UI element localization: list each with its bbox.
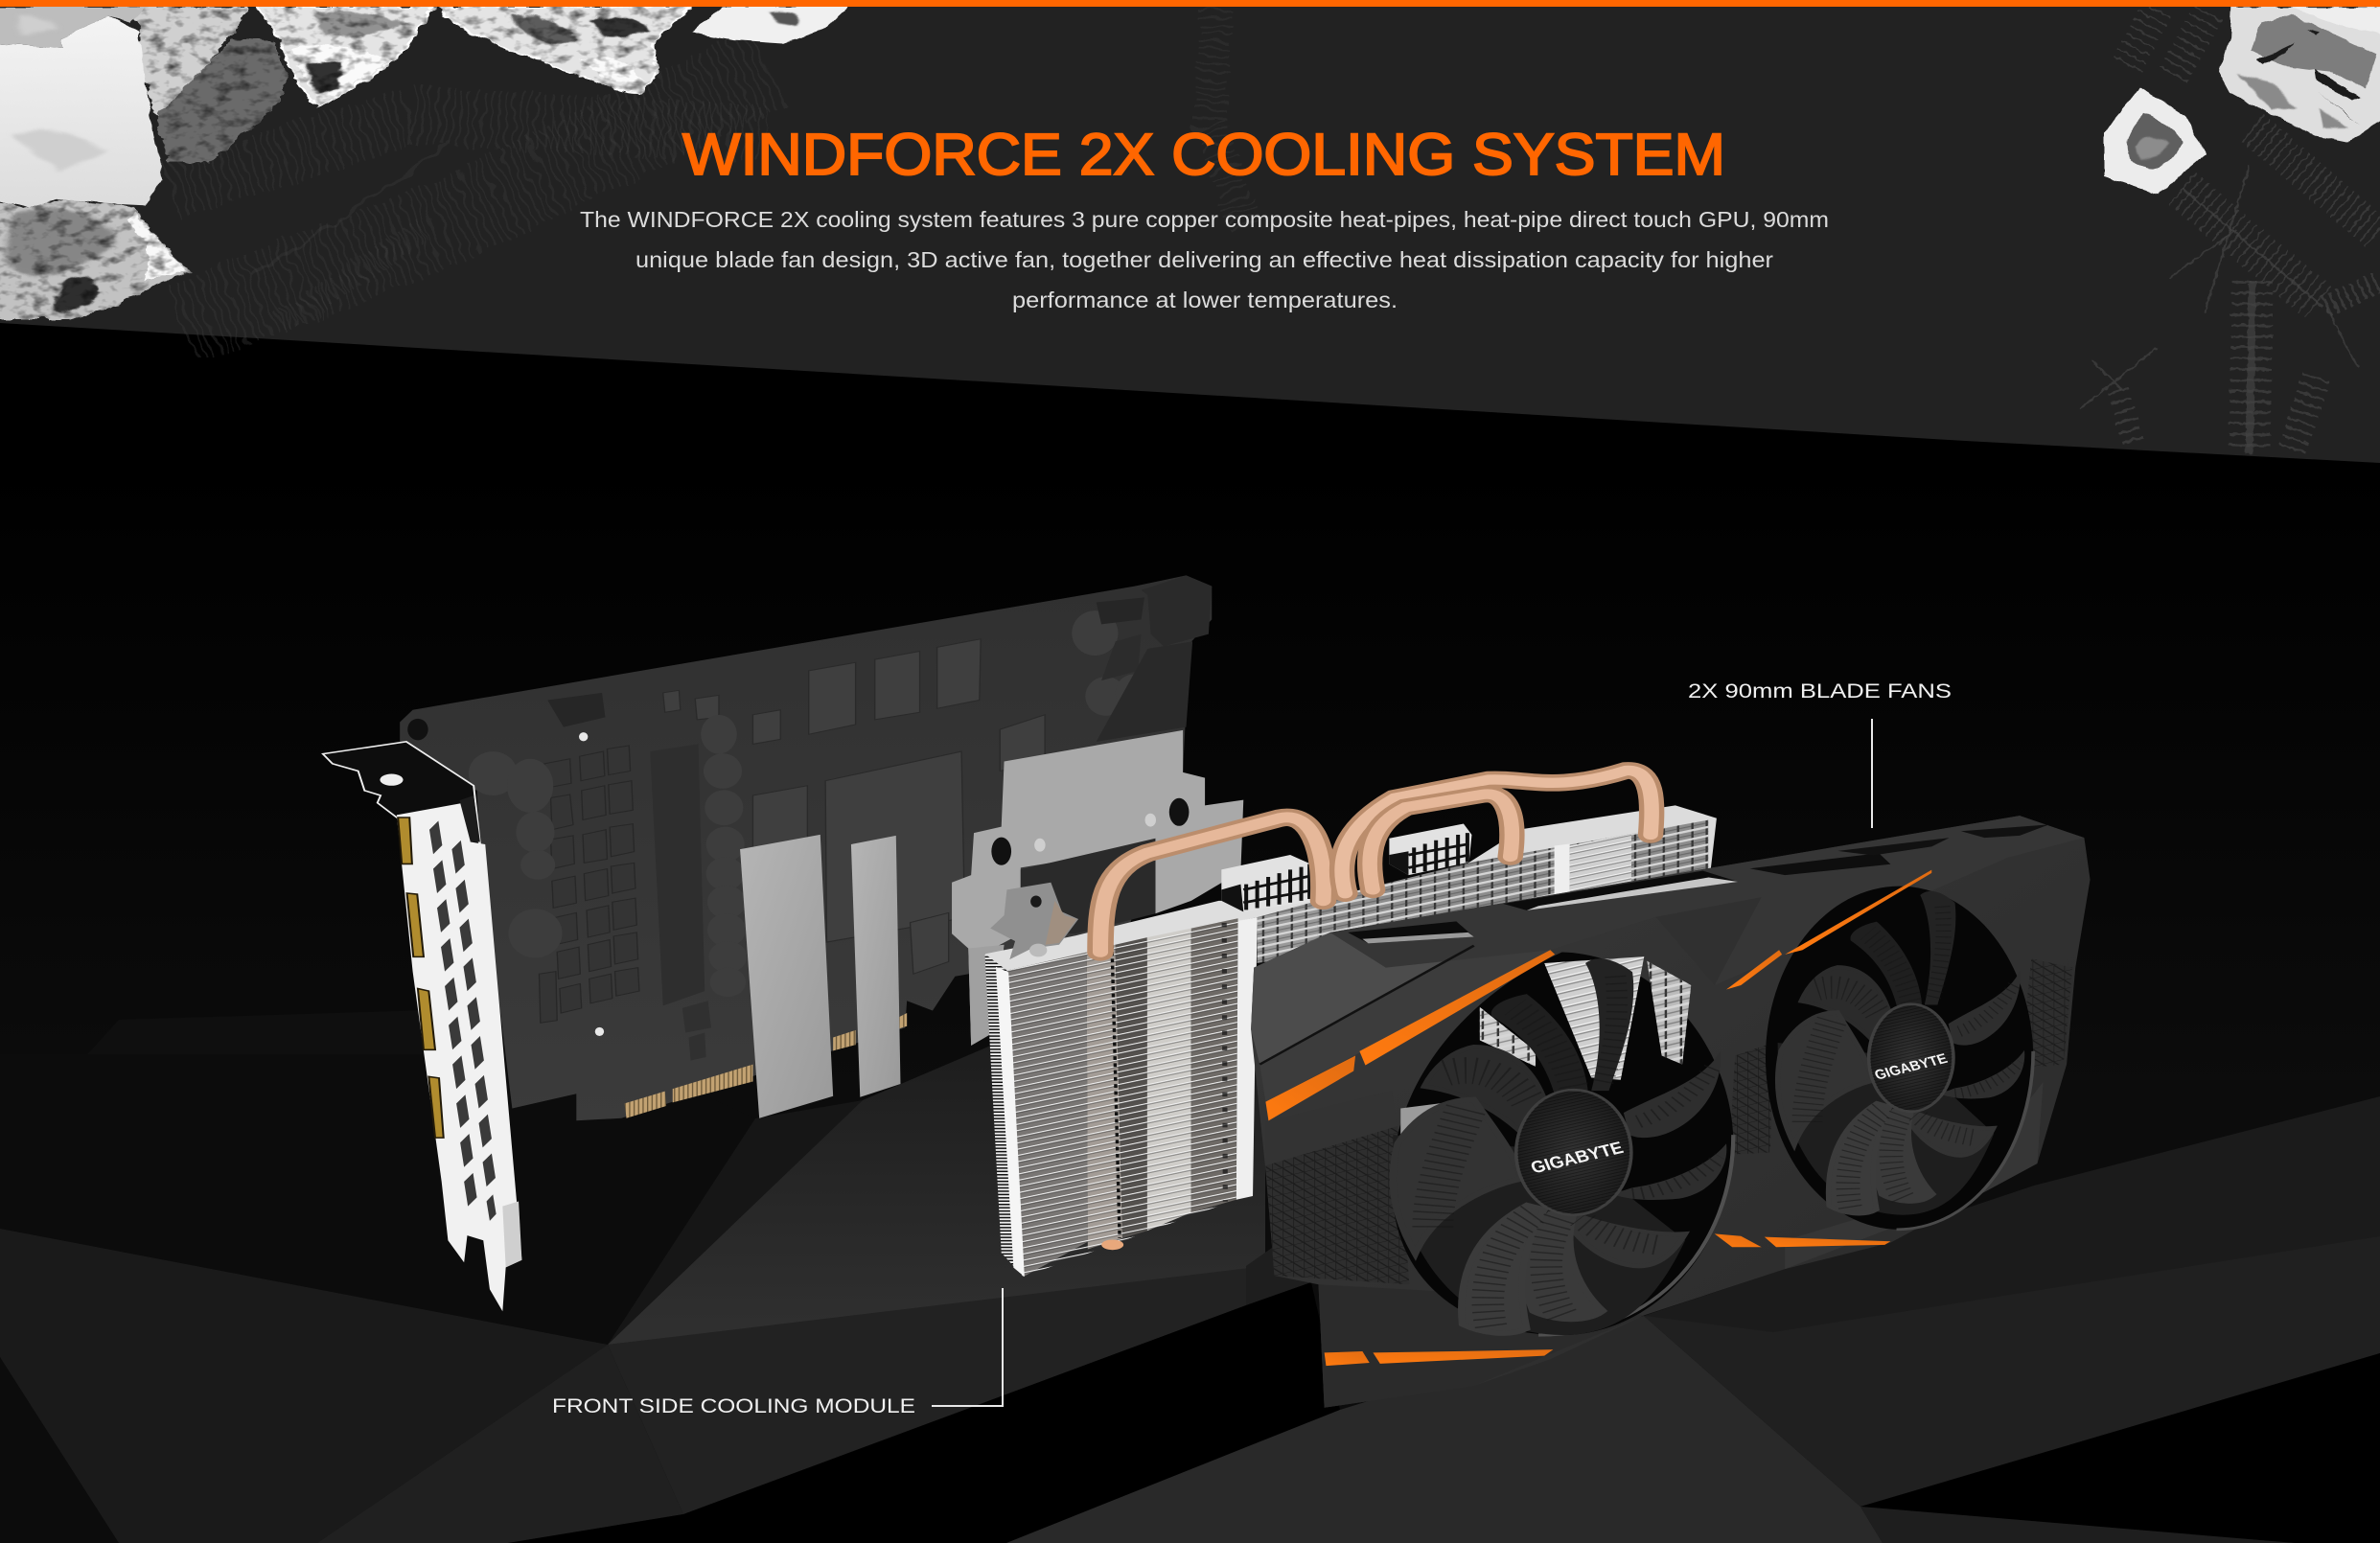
rear fin stack xyxy=(1258,805,1717,963)
copper heat pipe 1 xyxy=(1100,818,1324,952)
vent holes xyxy=(429,821,497,1221)
description text: performance at lower temperatures. xyxy=(1012,288,1398,312)
description text: The WINDFORCE 2X cooling system features 3 pure copper composite heat-pipes, heat-pipe direct touch GPU, 90mm xyxy=(580,207,1829,232)
metal retention bracket xyxy=(990,883,1078,959)
label: 2X 90mm blade fans: 2X 90mm BLADE FANS xyxy=(1688,680,1952,702)
circuit board and bracket xyxy=(323,575,1212,1311)
lower fin block strip xyxy=(1258,905,1318,963)
heatsink module xyxy=(952,730,1717,1277)
fins seen through fan 1 xyxy=(1400,956,1691,1135)
PCB xyxy=(400,575,1212,1120)
frost fern texture right xyxy=(2080,10,2380,453)
ice: mottled lower chunk xyxy=(0,195,189,319)
top panel: dark slanted header xyxy=(0,0,2380,463)
ice: rear chunk xyxy=(130,7,250,115)
fan 1 blades xyxy=(1393,958,1726,1335)
orange accents xyxy=(1265,870,1931,1366)
ice: large cube xyxy=(2219,7,2380,142)
ice cubes top left xyxy=(0,7,848,319)
top orange bar xyxy=(0,0,2380,7)
fan 1 logo: GIGABYTE xyxy=(1528,1139,1627,1178)
I/O bracket xyxy=(323,742,521,1311)
label: front side cooling module xyxy=(552,1288,1003,1417)
pipe end xyxy=(1101,1239,1123,1250)
voltage regulator grid xyxy=(539,746,639,1023)
description text: unique blade fan design, 3D active fan, together delivering an effective heat dissipation capacity for higher xyxy=(635,247,1773,272)
copper heat pipes 2 and 3 xyxy=(1342,771,1652,893)
top vents xyxy=(1348,824,2049,943)
fan 2 xyxy=(1766,887,2033,1230)
display ports xyxy=(398,818,444,1138)
fan header xyxy=(547,693,605,727)
ice cubes top right xyxy=(2104,7,2380,194)
ice: large white block xyxy=(0,7,163,207)
fan 2 logo: GIGABYTE xyxy=(1872,1050,1950,1083)
fin stub left xyxy=(1221,855,1315,911)
side mesh panels xyxy=(1265,958,2072,1284)
fan 1 hub xyxy=(1516,1090,1631,1215)
ice: dark translucent chunk xyxy=(157,40,288,163)
title: WINDFORCE 2X COOLING SYSTEM xyxy=(682,122,1725,187)
ice: pointed cube xyxy=(259,7,432,107)
ice: central cube xyxy=(439,7,691,93)
bracket tab xyxy=(323,742,480,844)
label: front side cooling module: FRONT SIDE COOLING MODULE xyxy=(552,1395,915,1417)
mounting plate xyxy=(952,730,1243,1046)
long vertical block xyxy=(650,744,705,1005)
graphics card cooler shroud xyxy=(1251,816,2091,1408)
fan 1 xyxy=(1392,953,1733,1335)
thermal pad small xyxy=(851,836,900,1097)
ice: right white chunk xyxy=(691,7,848,43)
right white strip xyxy=(1236,917,1258,1200)
fan 2 blades xyxy=(1778,891,2024,1215)
description text xyxy=(580,207,1829,312)
memory chips xyxy=(663,639,1045,974)
left edge comb xyxy=(984,954,1024,1277)
front fin face xyxy=(1006,918,1238,1277)
capacitors and chokes xyxy=(469,610,1151,997)
power connector xyxy=(1142,575,1212,646)
frost fern texture left and centre xyxy=(173,10,1246,326)
gold edge connector xyxy=(625,1013,907,1118)
top of front stack xyxy=(984,901,1318,971)
ice: small cube xyxy=(2104,88,2207,194)
fin stub right xyxy=(1389,824,1471,875)
fan 2 hub xyxy=(1869,1004,1953,1112)
shroud body xyxy=(1251,816,2091,1408)
thermal pad large xyxy=(740,835,833,1118)
